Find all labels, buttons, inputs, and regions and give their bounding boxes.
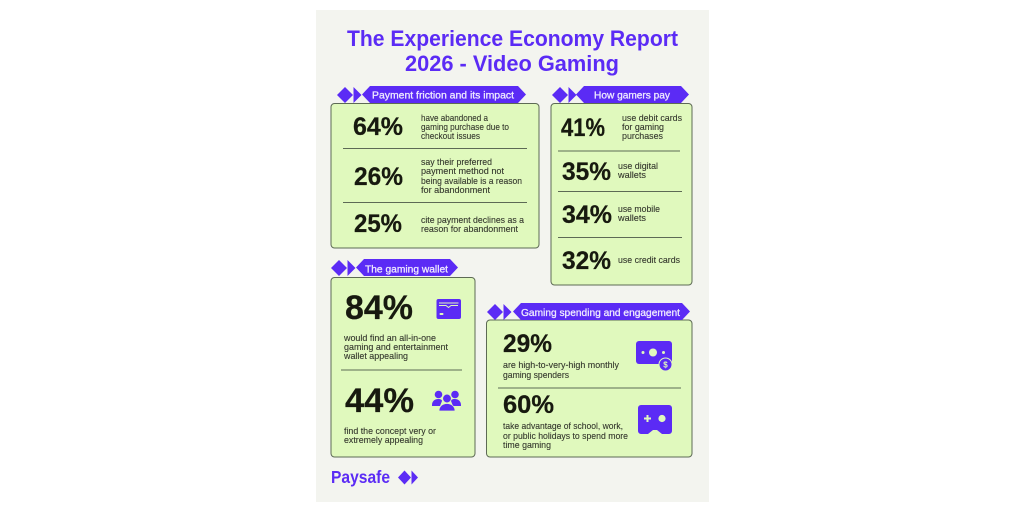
panel: payment friction: for abandonment [421, 184, 490, 195]
panel: payment friction: 64% [353, 113, 403, 141]
panel: payment friction: being available is a reason [421, 175, 522, 186]
panel: how gamers pay: 41% [561, 114, 605, 142]
panel: payment friction: payment method not [421, 165, 504, 176]
panel: payment friction: have abandoned a [421, 112, 489, 123]
title: The Experience Economy Report [347, 26, 678, 51]
panel: payment friction: Payment friction and its impact [372, 90, 514, 102]
icon: money with coin [636, 341, 672, 371]
poster background [316, 10, 709, 502]
panel: how gamers pay: use credit cards [618, 254, 680, 265]
panel: how gamers pay: How gamers pay [594, 90, 671, 102]
panel: how gamers pay: wallets [617, 212, 646, 223]
panel: gaming spending and engagement: are high-to-very-high monthly [503, 359, 619, 370]
panel: how gamers pay: 32% [562, 247, 611, 275]
panel: gaming spending and engagement: Gaming spending and engagement [521, 307, 680, 319]
logo: Paysafe: Paysafe [331, 467, 390, 487]
panel: gaming spending and engagement: or public holidays to spend more [503, 430, 628, 441]
panel: gaming spending and engagement: 60% [503, 391, 554, 419]
panel: payment friction: say their preferred [421, 156, 492, 167]
panel: payment friction: gaming purchase due to [421, 121, 509, 132]
icon: money with coin: $ [663, 360, 668, 370]
panel: the gaming wallet: find the concept very or [344, 425, 436, 436]
panel: how gamers pay: use debit cards [622, 112, 682, 123]
panel: the gaming wallet: 44% [345, 382, 414, 420]
panel: gaming spending and engagement: take advantage of school, work, [503, 420, 623, 431]
panel: the gaming wallet: wallet appealing [343, 350, 408, 361]
panel: gaming spending and engagement: gaming spenders [503, 369, 569, 380]
panel: gaming spending and engagement: time gaming [503, 439, 551, 450]
panel: payment friction: checkout issues [421, 130, 480, 141]
panel: the gaming wallet: gaming and entertainment [344, 341, 448, 352]
icon: wallet card [436, 299, 461, 319]
panel: payment friction: reason for abandonment [421, 223, 518, 234]
panel: how gamers pay: 34% [562, 201, 612, 229]
panel: how gamers pay: purchases [622, 130, 663, 141]
panel: how gamers pay: for gaming [622, 121, 664, 132]
title: 2026 - Video Gaming [405, 51, 619, 76]
panel: the gaming wallet: would find an all-in-one [343, 332, 436, 343]
panel: how gamers pay: use mobile [618, 203, 660, 214]
panel: the gaming wallet [331, 259, 475, 457]
title [347, 26, 678, 76]
panel: gaming spending and engagement [486, 303, 692, 457]
panel: payment friction: 25% [354, 210, 402, 238]
panel: the gaming wallet: 84% [345, 289, 413, 327]
panel: how gamers pay: use digital [618, 160, 658, 171]
panel: payment friction: 26% [354, 163, 403, 191]
panel: payment friction: cite payment declines as a [421, 214, 525, 225]
panel: how gamers pay: wallets [617, 169, 646, 180]
panel: how gamers pay [551, 86, 692, 285]
panel: the gaming wallet: The gaming wallet [365, 264, 448, 276]
icon: game controller headset [638, 405, 672, 434]
panel: payment friction [331, 86, 539, 248]
icon: group of people [432, 391, 461, 411]
panel: the gaming wallet: extremely appealing [344, 434, 423, 445]
panel: gaming spending and engagement: 29% [503, 330, 552, 358]
panel: how gamers pay: 35% [562, 158, 611, 186]
